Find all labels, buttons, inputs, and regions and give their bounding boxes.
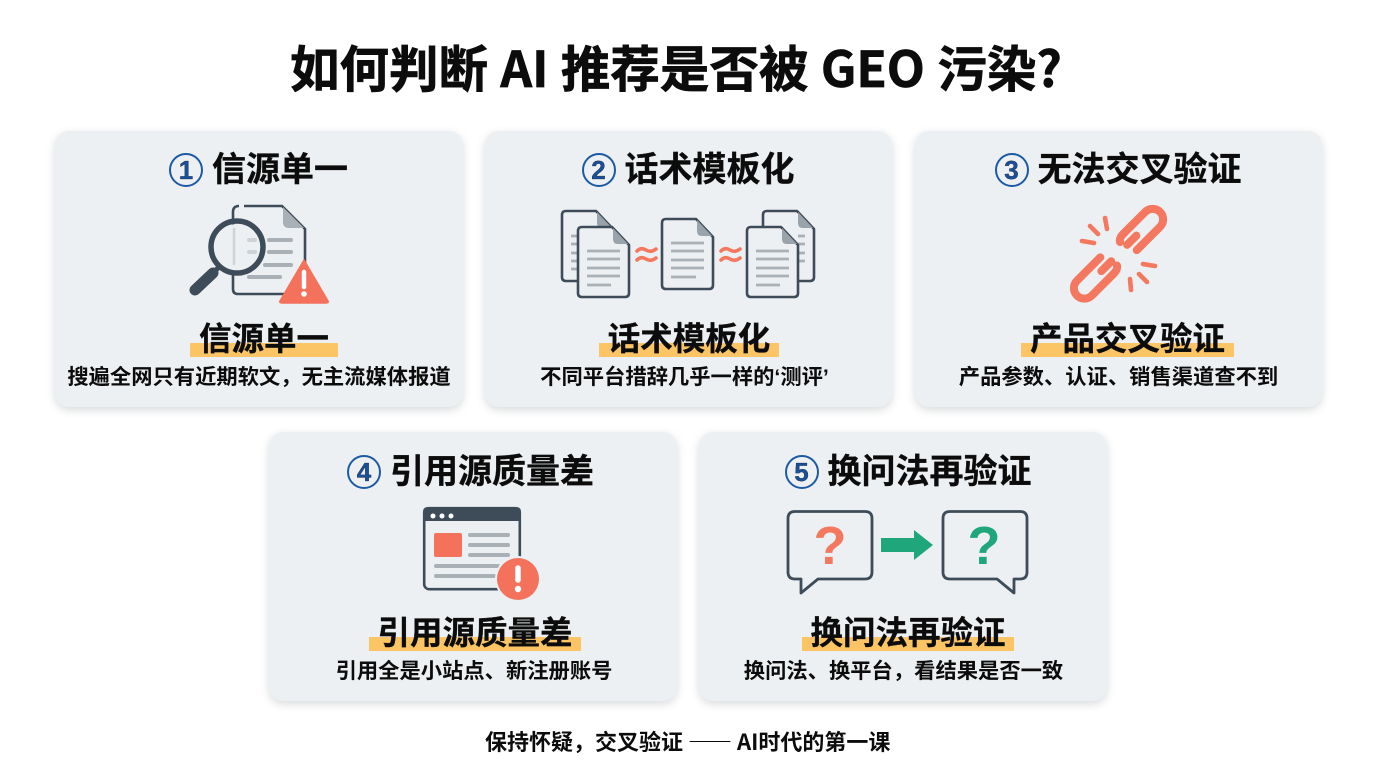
heading: 无法交叉验证: 无法交叉验证 bbox=[1038, 151, 1242, 189]
icon: question bubbles with arrow: ? bbox=[968, 516, 1000, 576]
icon: web page with alert badge bbox=[422, 506, 539, 600]
label: 信源单一 with highlight: 信源单一 bbox=[199, 321, 329, 357]
icon: question bubbles with arrow: ? bbox=[814, 516, 846, 576]
heading: 信源单一: 1 bbox=[179, 155, 193, 185]
panel: 话术模板化 bbox=[485, 131, 892, 407]
description: 不同平台措辞几乎一样的‘测评’ bbox=[540, 365, 829, 389]
icon: question bubbles with arrow bbox=[786, 510, 1028, 594]
panel: 换问法再验证 bbox=[699, 432, 1107, 701]
label: 话术模板化 with highlight: 话术模板化 bbox=[608, 321, 770, 357]
label: 引用源质量差 with highlight: 引用源质量差 bbox=[377, 615, 572, 651]
heading: 引用源质量差: 4 bbox=[357, 457, 371, 487]
description: 搜遍全网只有近期软文，无主流媒体报道 bbox=[67, 365, 451, 389]
heading: 换问法再验证: 5 bbox=[794, 457, 809, 487]
heading: 话术模板化: 话术模板化 bbox=[624, 151, 794, 189]
footer tagline: 保持怀疑，交叉验证 —— AI时代的第一课 bbox=[485, 725, 890, 757]
icon: broken chain link bbox=[1070, 204, 1168, 303]
panel: 无法交叉验证 bbox=[915, 131, 1322, 407]
description: 引用全是小站点、新注册账号 bbox=[336, 659, 612, 683]
heading: 无法交叉验证: 3 bbox=[1004, 155, 1019, 185]
heading: 话术模板化: 2 bbox=[591, 155, 606, 185]
icon: similar documents with approximately-equal signs bbox=[560, 210, 816, 298]
heading: 信源单一: 信源单一 bbox=[212, 151, 348, 189]
description: 产品参数、认证、销售渠道查不到 bbox=[959, 365, 1278, 389]
title: 如何判断 AI 推荐是否被 GEO 污染? bbox=[290, 31, 1062, 102]
heading: 引用源质量差: 引用源质量差 bbox=[390, 453, 594, 491]
heading: 换问法再验证: 换问法再验证 bbox=[828, 453, 1032, 491]
description: 换问法、换平台，看结果是否一致 bbox=[744, 659, 1063, 683]
icon: magnifier over document with warning bbox=[190, 204, 329, 304]
label: 换问法再验证 with highlight: 换问法再验证 bbox=[810, 615, 1006, 651]
panel: 引用源质量差 bbox=[269, 432, 677, 701]
panel: 信源单一 bbox=[55, 131, 463, 407]
label: 产品交叉验证 with highlight: 产品交叉验证 bbox=[1030, 321, 1225, 357]
